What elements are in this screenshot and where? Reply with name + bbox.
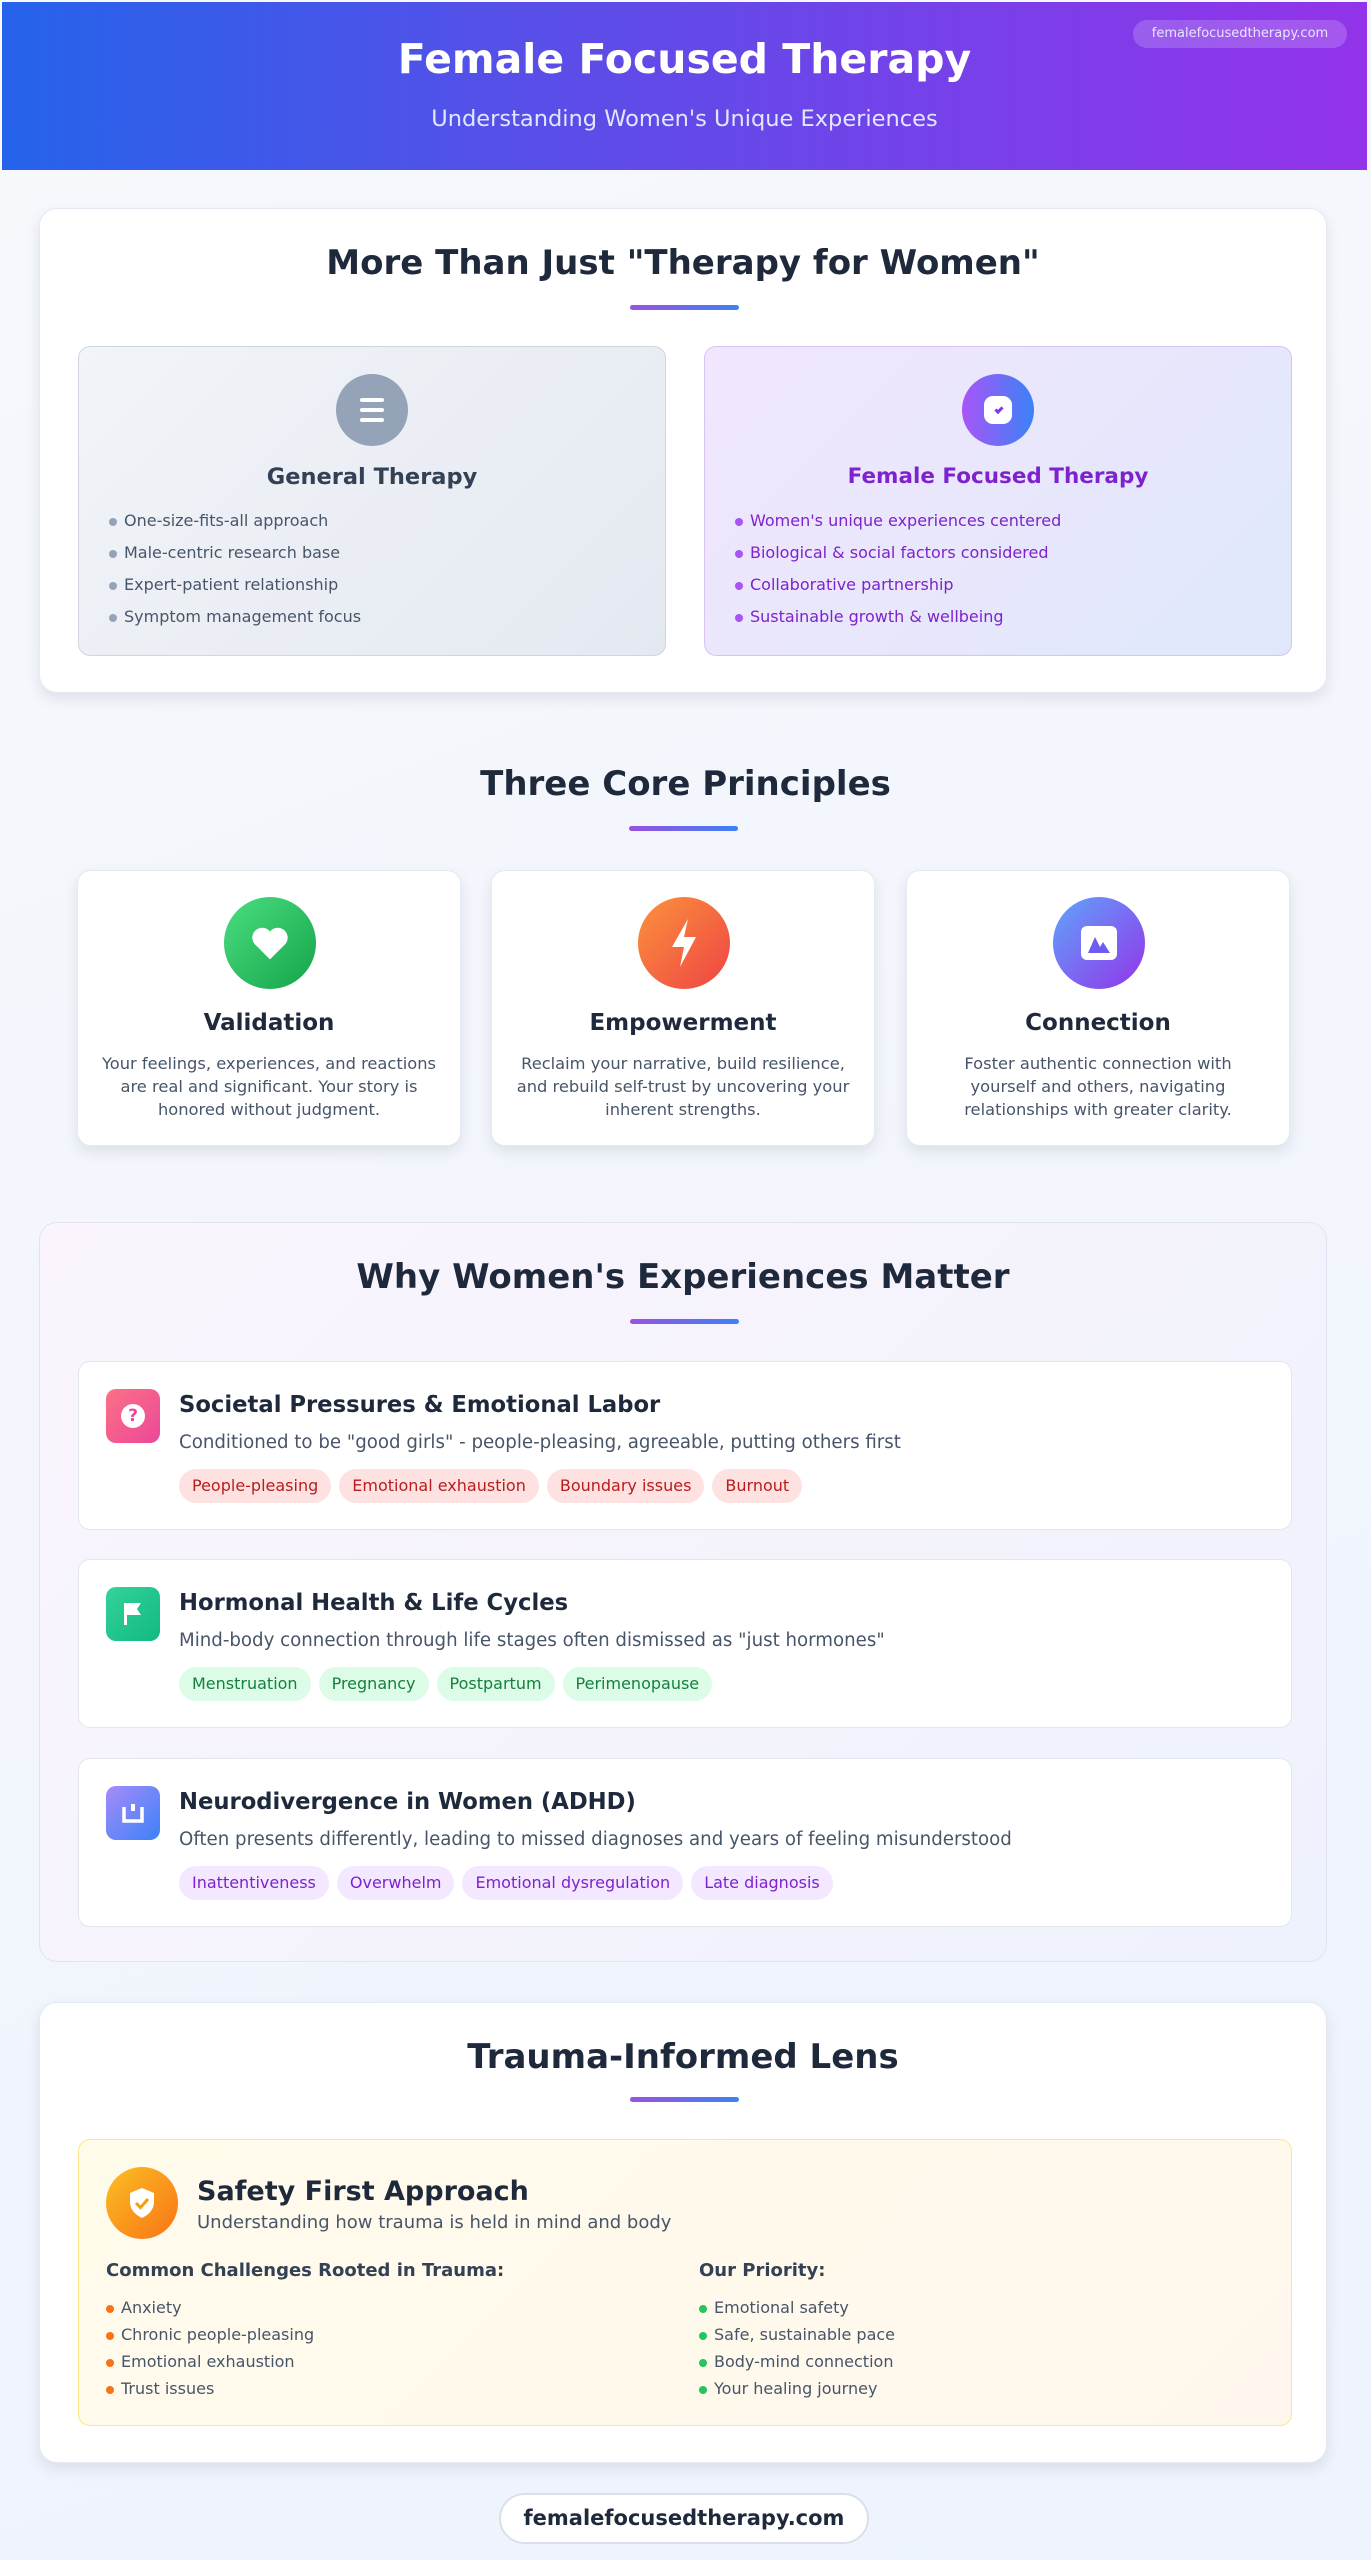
header title: Female Focused Therapy: [398, 35, 971, 83]
tags societal: People-pleasing: [192, 1476, 318, 1495]
tags neuro: Late diagnosis: [704, 1873, 820, 1892]
tags neuro: [179, 1866, 833, 1900]
principle: empowerment: [491, 870, 875, 1146]
panel: why women's experiences matter: [39, 1222, 1327, 1962]
item: neurodivergence: [78, 1758, 1292, 1927]
panel: comparison: [39, 208, 1327, 693]
title safety: Safety First Approach: [197, 2176, 529, 2207]
desc empowerment: Reclaim your narrative, build resilience, and rebuild self-trust by uncovering your inherent strengths.: [517, 1054, 849, 1119]
icon: flag: [106, 1587, 160, 1641]
subpanel: general therapy: [78, 346, 666, 656]
heading: More Than Just: More Than Just "Therapy for Women": [326, 243, 1040, 283]
icon: list: [336, 374, 408, 446]
list female: Sustainable growth & wellbeing: [750, 607, 1004, 626]
title empowerment: Empowerment: [589, 1010, 777, 1036]
item: hormonal health: [78, 1559, 1292, 1728]
item: societal pressures: [78, 1361, 1292, 1530]
principle: connection: [906, 870, 1290, 1146]
column: priority: [699, 2260, 895, 2398]
list female: [735, 511, 1061, 626]
column: priority: Emotional safety: [714, 2298, 849, 2317]
footer: website pill: [499, 2493, 869, 2544]
desc connection: Foster authentic connection with yourself and others, navigating relationships with greater clarity.: [964, 1054, 1232, 1119]
title neuro: Neurodivergence in Women (ADHD): [179, 1789, 636, 1815]
icon: question: [106, 1389, 160, 1443]
tags hormonal: Postpartum: [450, 1674, 542, 1693]
title societal: Societal Pressures & Emotional Labor: [179, 1392, 660, 1418]
list general: Symptom management focus: [124, 607, 361, 626]
list female: Women's unique experiences centered: [750, 511, 1061, 530]
column: challenges: Chronic people-pleasing: [121, 2325, 314, 2344]
tags societal: [179, 1469, 802, 1503]
icon: brain box: [106, 1786, 160, 1840]
title general: General Therapy: [267, 464, 477, 490]
tags hormonal: Perimenopause: [576, 1674, 699, 1693]
icon: heart: [224, 897, 316, 989]
desc neuro: Often presents differently, leading to missed diagnoses and years of feeling misunderstood: [179, 1829, 1012, 1850]
principle: validation: [77, 870, 461, 1146]
tags neuro: Emotional dysregulation: [475, 1873, 670, 1892]
column: challenges: [106, 2260, 504, 2398]
heading: why: Why Women's Experiences Matter: [356, 1257, 1010, 1297]
title connection: Connection: [1025, 1010, 1171, 1036]
column: priority: Safe, sustainable pace: [714, 2325, 895, 2344]
icon: picture: [1053, 897, 1145, 989]
column: priority: Body-mind connection: [714, 2352, 893, 2371]
tags neuro: Overwhelm: [350, 1873, 441, 1892]
icon: badge check: [962, 374, 1034, 446]
column: challenges: Emotional exhaustion: [121, 2352, 295, 2371]
heading: Three Core Principles: Three Core Principles: [480, 764, 891, 804]
desc validation: Your feelings, experiences, and reactions are real and significant. Your story is honored without judgment.: [102, 1054, 436, 1119]
title validation: Validation: [204, 1010, 334, 1036]
header banner: [2, 2, 1367, 170]
icon: question: ?: [128, 1406, 138, 1426]
callout: safety first: [78, 2139, 1292, 2426]
list female: Collaborative partnership: [750, 575, 954, 594]
desc hormonal: Mind-body connection through life stages often dismissed as "just hormones": [179, 1630, 885, 1651]
subtitle safety: Understanding how trauma is held in mind and body: [197, 2212, 671, 2233]
column: priority: Our Priority:: [699, 2260, 825, 2281]
title female: Female Focused Therapy: [848, 464, 1148, 489]
tags societal: Burnout: [725, 1476, 789, 1495]
column: challenges: Common Challenges Rooted in Trauma:: [106, 2260, 504, 2281]
icon: lightning: [638, 897, 730, 989]
title hormonal: Hormonal Health & Life Cycles: [179, 1590, 568, 1616]
tags societal: Boundary issues: [560, 1476, 691, 1495]
list general: [109, 511, 361, 626]
panel: trauma-informed lens: [39, 2002, 1327, 2463]
footer: website pill: femalefocusedtherapy.com: [524, 2506, 844, 2530]
tags hormonal: Pregnancy: [332, 1674, 416, 1693]
list general: Male-centric research base: [124, 543, 340, 562]
heading: trauma: Trauma-Informed Lens: [467, 2037, 899, 2077]
tags hormonal: [179, 1667, 712, 1701]
tags neuro: Inattentiveness: [192, 1873, 316, 1892]
list general: One-size-fits-all approach: [124, 511, 328, 530]
tags hormonal: Menstruation: [192, 1674, 298, 1693]
list female: Biological & social factors considered: [750, 543, 1048, 562]
website badge: [1133, 20, 1347, 48]
tags societal: Emotional exhaustion: [352, 1476, 526, 1495]
column: priority: Your healing journey: [714, 2379, 877, 2398]
icon: shield: [106, 2167, 178, 2239]
header subtitle: Understanding Women's Unique Experiences: [431, 106, 938, 132]
column: challenges: Trust issues: [121, 2379, 214, 2398]
desc societal: Conditioned to be "good girls" - people-pleasing, agreeable, putting others first: [179, 1432, 901, 1453]
list general: Expert-patient relationship: [124, 575, 338, 594]
column: challenges: Anxiety: [121, 2298, 182, 2317]
subpanel: female focused therapy: [704, 346, 1292, 656]
website badge: femalefocusedtherapy.com: [1152, 26, 1328, 41]
